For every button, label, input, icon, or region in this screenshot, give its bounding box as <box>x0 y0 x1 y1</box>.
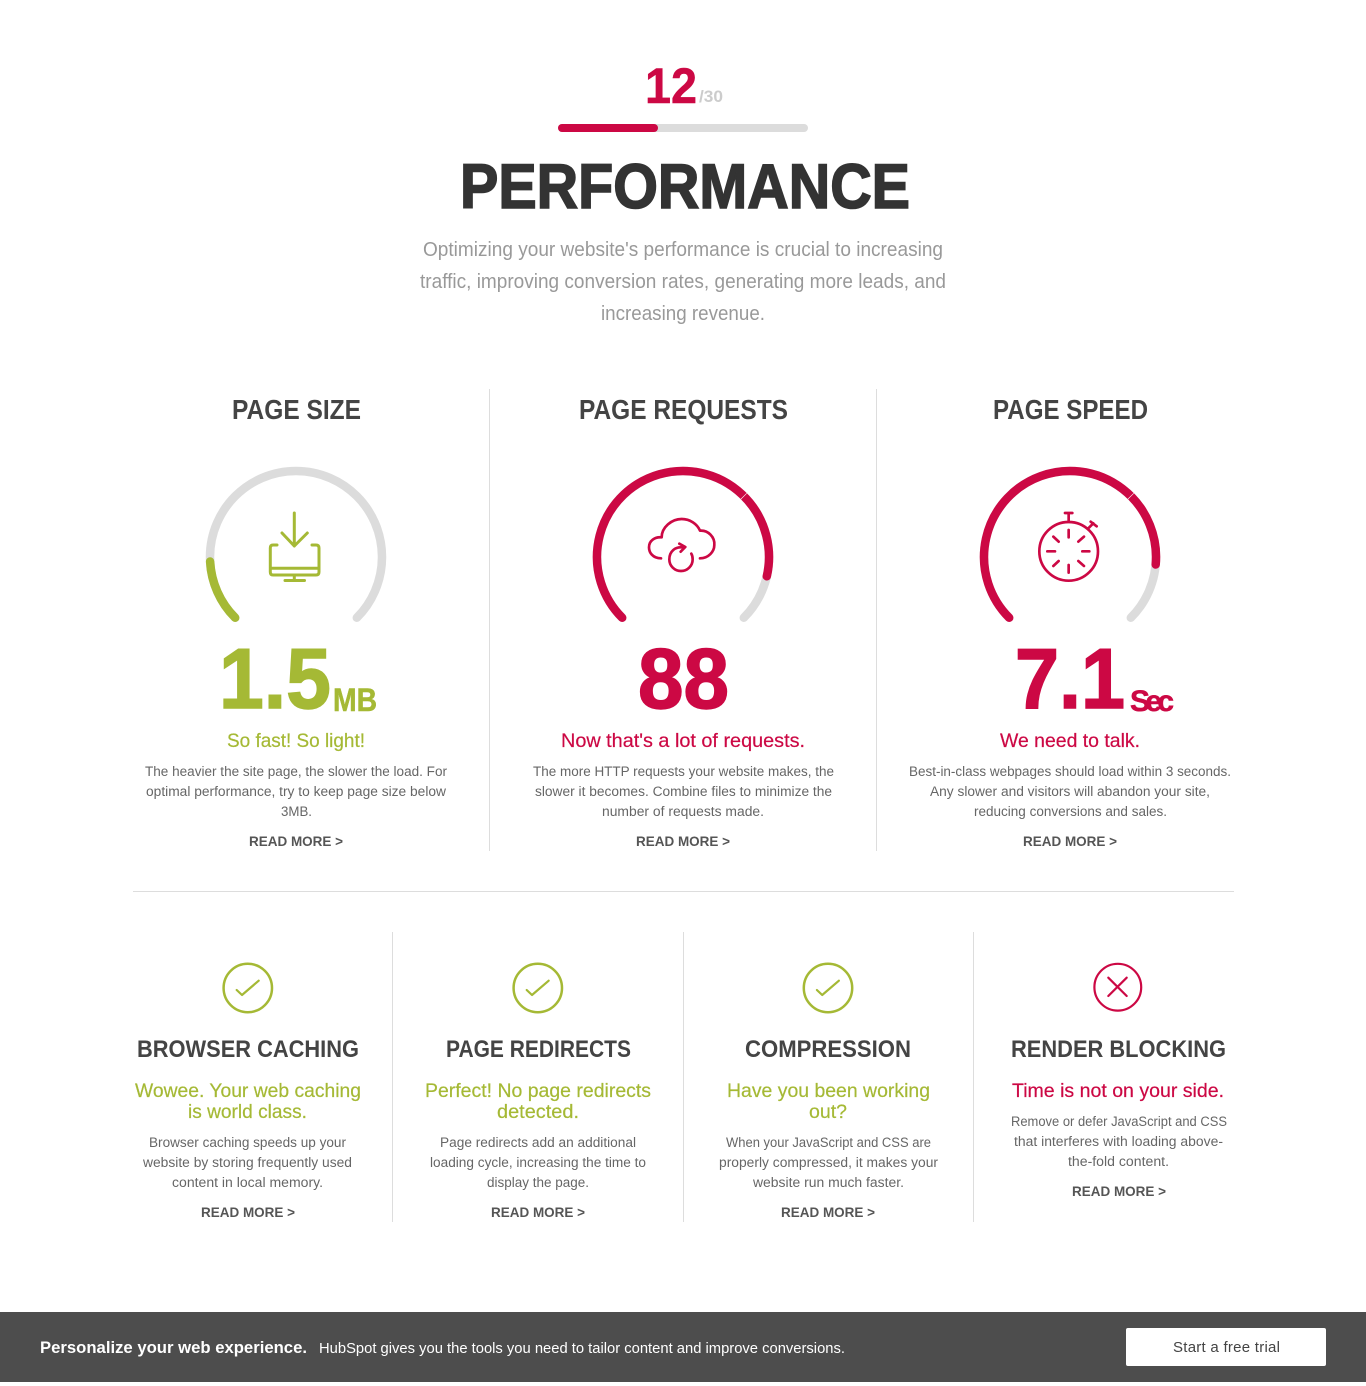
description: number of requests made. <box>602 804 764 819</box>
heading: page size: PAGE SIZE <box>232 394 361 425</box>
panel: page requests <box>533 394 834 849</box>
icon: stopwatch <box>1039 513 1098 581</box>
panel: render blocking <box>1011 964 1227 1199</box>
heading: PAGE REDIRECTS <box>446 1036 631 1063</box>
description <box>719 1135 939 1190</box>
icon: check <box>804 964 852 1012</box>
panel: page redirects <box>425 964 651 1220</box>
gauge: page speed <box>984 471 1156 618</box>
icon: cloud refresh <box>649 519 714 571</box>
description: slower it becomes. Combine files to minimize the <box>535 784 832 799</box>
icon: cross <box>1094 964 1141 1011</box>
link: READ MORE > <box>1023 833 1117 849</box>
score: 12 of 30: /30 <box>699 88 723 106</box>
heading: page requests: PAGE REQUESTS <box>579 394 788 425</box>
verdict: out? <box>809 1101 847 1123</box>
description <box>142 1135 352 1190</box>
value: 88: 88 <box>638 632 729 727</box>
description: display the page. <box>487 1175 589 1190</box>
description: When your JavaScript and CSS are <box>726 1135 931 1150</box>
value: 1.5 MB: MB <box>333 682 377 718</box>
verdict: We need to talk. <box>1000 730 1140 752</box>
link: READ MORE > <box>249 833 343 849</box>
description <box>430 1135 646 1190</box>
heading: RENDER BLOCKING <box>1011 1036 1226 1063</box>
verdict: So fast! So light! <box>227 730 365 752</box>
description: website run much faster. <box>752 1175 904 1190</box>
score progress bar <box>558 124 808 132</box>
description <box>1011 1114 1227 1169</box>
description: properly compressed, it makes your <box>719 1155 939 1170</box>
button: start a free trial: Start a free trial <box>1173 1339 1280 1356</box>
button: start a free trial <box>1126 1328 1326 1366</box>
description: optimal performance, try to keep page size below <box>146 784 446 799</box>
title: PERFORMANCE <box>460 152 910 222</box>
link: READ MORE > <box>636 833 730 849</box>
verdict <box>425 1080 651 1123</box>
verdict: Time is not on your side. <box>1012 1080 1224 1102</box>
description: Any slower and visitors will abandon your site, <box>930 784 1210 799</box>
description: loading cycle, increasing the time to <box>430 1155 646 1170</box>
heading: COMPRESSION <box>745 1036 911 1063</box>
description: Browser caching speeds up your <box>149 1135 347 1150</box>
heading: BROWSER CACHING <box>137 1036 359 1063</box>
verdict: Have you been working <box>727 1080 930 1102</box>
footer banner <box>0 1312 1366 1382</box>
panel: compression <box>719 964 939 1220</box>
icon: check <box>224 964 272 1012</box>
description: Remove or defer JavaScript and CSS <box>1011 1114 1227 1129</box>
description: the-fold content. <box>1068 1154 1169 1169</box>
description: that interferes with loading above- <box>1014 1134 1223 1149</box>
intro paragraph <box>420 239 946 325</box>
icon: download to monitor <box>270 513 319 580</box>
panel: page speed <box>909 394 1231 849</box>
value: 7.1 Sec: 7.1 <box>1015 632 1125 727</box>
description: 3MB. <box>281 804 312 819</box>
description: website by storing frequently used <box>142 1155 352 1170</box>
panel: browser caching <box>135 964 361 1220</box>
description: Best-in-class webpages should load within 3 seconds. <box>909 764 1231 779</box>
verdict: is world class. <box>188 1101 307 1123</box>
description: The heavier the site page, the slower the load. For <box>145 764 447 779</box>
verdict: detected. <box>497 1101 579 1123</box>
intro paragraph: increasing revenue. <box>601 303 765 325</box>
description: content in local memory. <box>172 1175 323 1190</box>
verdict: Now that's a lot of requests. <box>561 730 805 752</box>
banner text: HubSpot gives you the tools you need to tailor content and improve conversions. <box>319 1340 845 1357</box>
intro paragraph: traffic, improving conversion rates, generating more leads, and <box>420 271 946 293</box>
description <box>533 764 834 819</box>
description <box>909 764 1231 819</box>
link: READ MORE > <box>1072 1183 1166 1199</box>
icon: check <box>514 964 562 1012</box>
intro paragraph: Optimizing your website's performance is crucial to increasing <box>423 239 943 261</box>
link: READ MORE > <box>781 1204 875 1220</box>
verdict <box>727 1080 930 1123</box>
link: READ MORE > <box>491 1204 585 1220</box>
description: Page redirects add an additional <box>440 1135 636 1150</box>
value: 7.1 Sec: Sec <box>1130 685 1174 718</box>
score: 12 of 30: 12 <box>645 58 697 114</box>
verdict: Perfect! No page redirects <box>425 1080 651 1102</box>
value: 1.5 MB: 1.5 <box>219 632 331 727</box>
panel: page size <box>145 394 447 849</box>
description <box>145 764 447 819</box>
heading: page speed: PAGE SPEED <box>993 394 1148 425</box>
description: The more HTTP requests your website makes, the <box>533 764 834 779</box>
gauge: page size <box>210 471 382 618</box>
gauge: page requests <box>597 471 769 618</box>
verdict: Wowee. Your web caching <box>135 1080 361 1102</box>
link: READ MORE > <box>201 1204 295 1220</box>
banner headline: Personalize your web experience. <box>40 1338 307 1357</box>
description: reducing conversions and sales. <box>974 804 1167 819</box>
verdict <box>135 1080 361 1123</box>
